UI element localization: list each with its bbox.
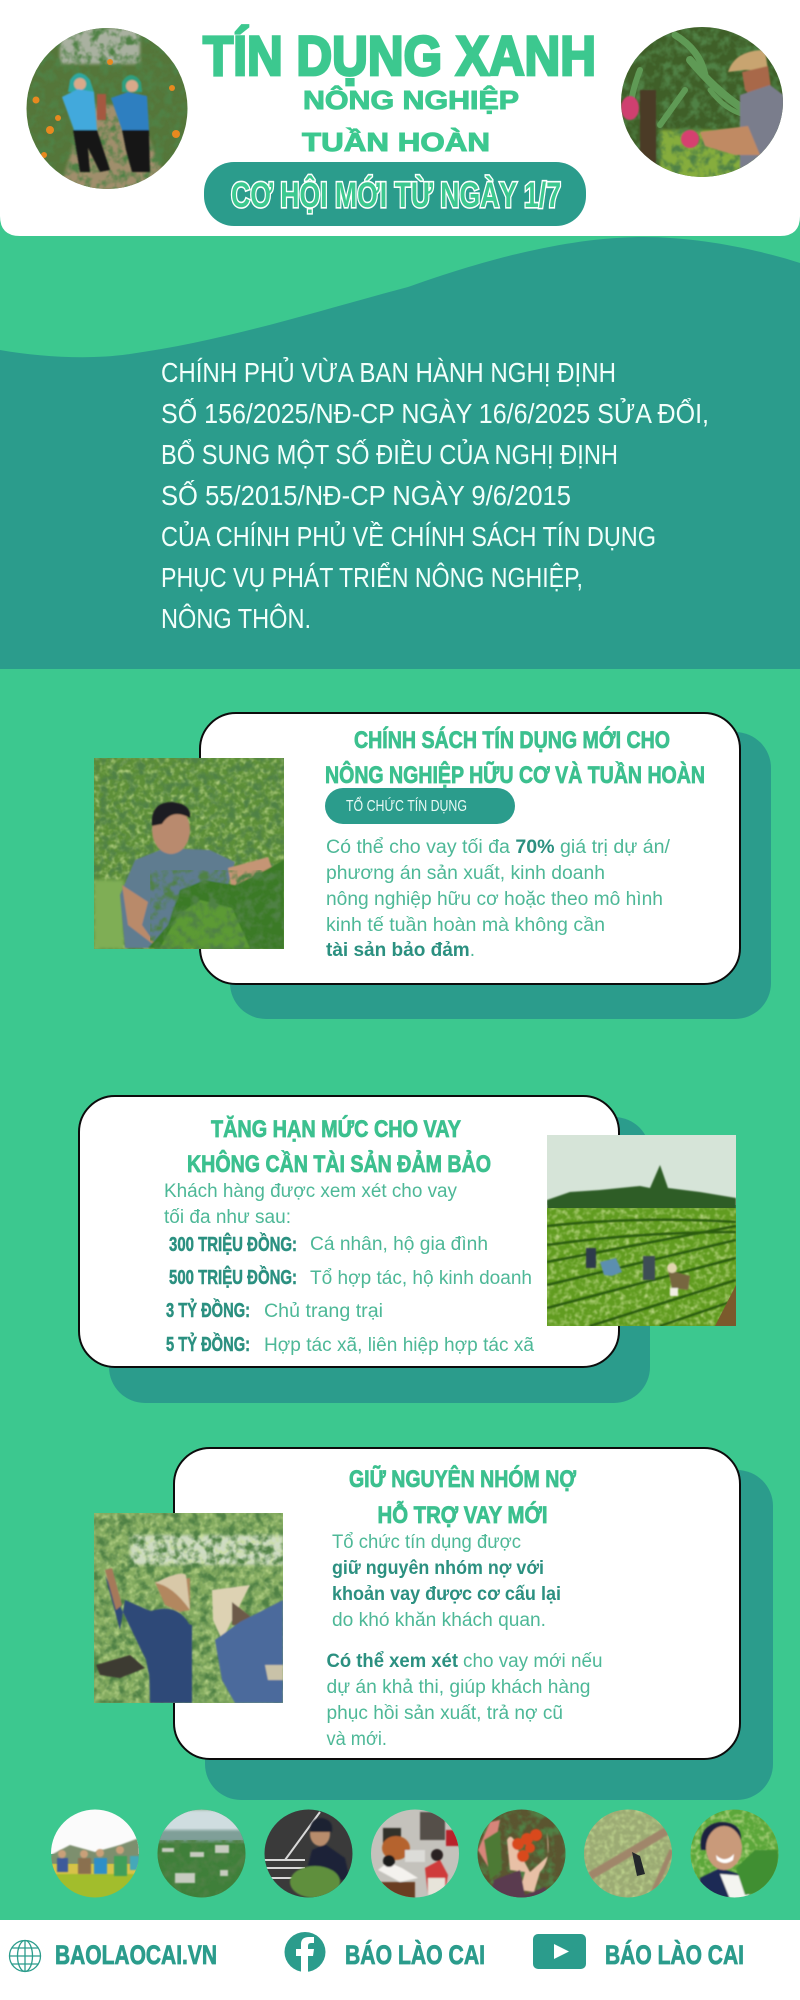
photo: hands holding tomatoes <box>477 1809 566 1899</box>
icon: youtube <box>533 1934 586 1969</box>
body text: debt group: Tổ chức tín dụng được <box>332 1532 521 1553</box>
audience pill: TỔ CHỨC TÍN DỤNG <box>346 796 467 815</box>
body text: nông nghiệp hữu cơ hoặc theo mô hình <box>326 889 663 910</box>
subtitle line 1: NÔNG NGHIỆP <box>303 85 519 115</box>
body text: new loans: và mới. <box>326 1729 387 1750</box>
intro text <box>161 356 709 634</box>
limit list: 3 TỶ ĐỒNG: <box>166 1298 250 1322</box>
photo: valley town <box>157 1809 246 1900</box>
heading <box>349 1465 576 1529</box>
intro sentence: Khách hàng được xem xét cho vay <box>164 1181 457 1202</box>
date pill: CƠ HỘI MỚI TỪ NGÀY 1/7 <box>231 175 561 215</box>
intro text: NÔNG THÔN. <box>161 603 311 634</box>
website label: BAOLAOCAI.VN <box>55 1940 217 1970</box>
date pill <box>204 162 586 226</box>
heading: HỖ TRỢ VAY MỚI <box>378 1500 548 1529</box>
heading: KHÔNG CẦN TÀI SẢN ĐẢM BẢO <box>187 1149 491 1178</box>
body text: new loans <box>326 1651 602 1750</box>
body text <box>326 837 671 961</box>
photo: terraced field aerial <box>584 1809 673 1899</box>
heading: GIỮ NGUYÊN NHÓM NỢ <box>349 1465 576 1493</box>
photo: smiling woman with leaves <box>690 1809 779 1899</box>
body text: tài sản bảo đảm. <box>326 940 475 961</box>
heading <box>187 1115 491 1178</box>
body text: new loans: phục hồi sản xuất, trả nợ cũ <box>326 1703 563 1724</box>
intro sentence: tối đa như sau: <box>164 1207 291 1228</box>
title: TÍN DỤNG XANH <box>203 24 596 87</box>
header panel <box>0 0 800 236</box>
intro text: PHỤC VỤ PHÁT TRIỂN NÔNG NGHIỆP, <box>161 562 583 593</box>
body text: new loans: cho vay mới nếu <box>463 1651 602 1672</box>
panel: organic and circular credit policy <box>94 713 771 1019</box>
body text: new loans: Có thể xem xét <box>326 1651 459 1672</box>
body text: Có thể cho vay tối đa 70% giá trị dự án/ <box>326 837 671 858</box>
body text: debt group: khoản vay được cơ cấu lại <box>332 1584 561 1605</box>
footer panel <box>0 1920 800 2000</box>
subtitle line 2: TUẦN HOÀN <box>302 127 490 157</box>
facebook label: BÁO LÀO CAI <box>345 1939 485 1970</box>
photo: man with dragon fruit <box>621 27 790 180</box>
icon: globe <box>10 1940 40 1972</box>
body text: debt group <box>332 1532 561 1631</box>
intro text: SỐ 55/2015/NĐ-CP NGÀY 9/6/2015 <box>161 479 571 511</box>
limit list: Hợp tác xã, liên hiệp hợp tác xã <box>264 1335 534 1356</box>
photo: farmer among citrus trees <box>94 758 284 949</box>
audience pill <box>325 788 515 824</box>
icon: facebook <box>284 1932 326 1972</box>
heading: NÔNG NGHIỆP HỮU CƠ VÀ TUẦN HOÀN <box>325 761 705 789</box>
body text: debt group: do khó khăn khách quan. <box>332 1610 546 1631</box>
intro text: BỔ SUNG MỘT SỐ ĐIỀU CỦA NGHỊ ĐỊNH <box>161 438 618 470</box>
photo strip <box>51 1809 779 1900</box>
intro text: SỐ 156/2025/NĐ-CP NGÀY 16/6/2025 SỬA ĐỔI, <box>161 397 709 429</box>
limit list: Tổ hợp tác, hộ kinh doanh <box>310 1268 532 1289</box>
body text: kinh tế tuần hoàn mà không cần <box>326 915 605 936</box>
limit list: 5 TỶ ĐỒNG: <box>166 1332 250 1356</box>
body text: phương án sản xuất, kinh doanh <box>326 863 605 884</box>
heading <box>325 726 705 789</box>
heading: CHÍNH SÁCH TÍN DỤNG MỚI CHO <box>354 726 670 754</box>
limit list: 500 TRIỆU ĐỒNG: <box>169 1265 297 1289</box>
limit list: Chủ trang trại <box>264 1301 383 1322</box>
photo: two women harvesting oranges <box>26 28 188 190</box>
limit list <box>166 1232 534 1356</box>
photo: farmers in rice field <box>51 1809 139 1899</box>
intro sentence <box>164 1181 457 1228</box>
panel: keep debt group, support new loans <box>94 1448 773 1800</box>
youtube label: BÁO LÀO CAI <box>605 1939 744 1970</box>
photo: two farmers with conical hats <box>94 1513 283 1703</box>
photo: bank counter <box>371 1809 460 1900</box>
intro panel with wave <box>0 237 800 669</box>
intro text: CỦA CHÍNH PHỦ VỀ CHÍNH SÁCH TÍN DỤNG <box>161 520 656 552</box>
panel: higher unsecured loan limits <box>79 1096 736 1403</box>
intro text: CHÍNH PHỦ VỪA BAN HÀNH NGHỊ ĐỊNH <box>161 356 616 388</box>
limit list: 300 TRIỆU ĐỒNG: <box>169 1232 297 1256</box>
heading: TĂNG HẠN MỨC CHO VAY <box>211 1115 461 1143</box>
body text: new loans: dự án khả thi, giúp khách hàng <box>326 1677 590 1698</box>
body text: debt group: giữ nguyên nhóm nợ với <box>332 1558 544 1579</box>
photo: workers in tea field <box>547 1135 736 1326</box>
photo: man with tea leaves <box>264 1809 353 1899</box>
limit list: Cá nhân, hộ gia đình <box>310 1234 488 1255</box>
